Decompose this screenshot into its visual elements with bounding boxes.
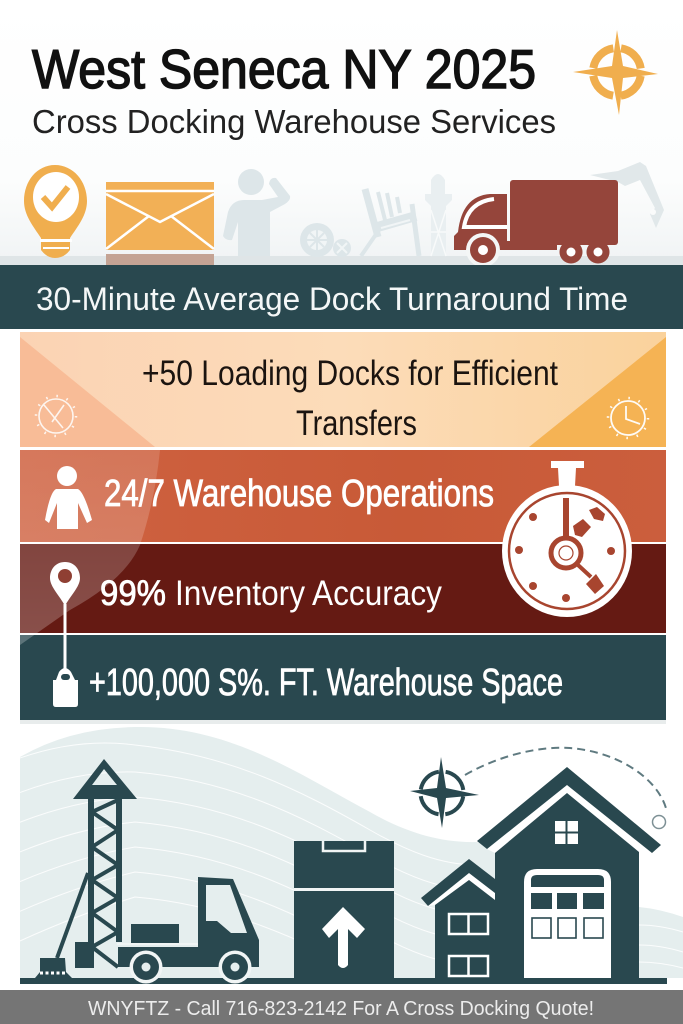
faded icon row: [223, 162, 664, 257]
row: loading docks: [20, 332, 666, 447]
icon: dark compass with dashed route: [410, 748, 667, 828]
footer bar: [0, 990, 683, 1024]
background wave: [0, 727, 683, 978]
icon: lightbulb: [24, 165, 87, 258]
icon: person: [45, 466, 92, 529]
icon: stopwatch: [502, 461, 632, 617]
icon: flatbed truck: [117, 877, 259, 984]
accuracy text: 99%: [100, 574, 166, 613]
loading docks text line 2: Transfers: [296, 404, 417, 443]
panel: metrics stack: [20, 332, 666, 720]
icon: right clock: [608, 398, 648, 438]
icon: faded crane arm: [590, 162, 664, 228]
ground line: [20, 978, 667, 984]
title: West Seneca NY 2025: [32, 38, 536, 100]
panel shadow: [20, 720, 666, 724]
icon: faded chair: [361, 189, 419, 256]
footer text: WNYFTZ - Call 716-823-2142 For A Cross Docking Quote!: [88, 998, 594, 1020]
icon: faded person: [223, 169, 290, 256]
panel: headline band: [0, 265, 683, 329]
icon: warehouse building: [477, 767, 661, 979]
headline text: 30-Minute Average Dock Turnaround Time: [36, 281, 628, 317]
icon: envelope: [106, 182, 214, 265]
row: warehouse operations: [20, 450, 666, 542]
icon: left clock: [36, 396, 76, 436]
loading docks text: +50 Loading Docks for Efficient: [142, 354, 558, 393]
row: inventory accuracy: [20, 544, 666, 633]
icon: small house: [421, 859, 495, 979]
icon: location pin and tag: [50, 562, 80, 707]
icon: faded tower: [425, 174, 452, 256]
icon: delivery truck: [454, 180, 618, 267]
icon: faded wheels: [300, 223, 351, 257]
translucent sheen: [20, 450, 160, 645]
icon: package box with arrow: [294, 841, 394, 979]
icon: orange compass star: [573, 30, 658, 115]
operations text: 24/7 Warehouse Operations: [104, 473, 494, 515]
subtitle: Cross Docking Warehouse Services: [32, 103, 556, 140]
shadow strip above band: [0, 256, 683, 265]
accuracy text: Inventory Accuracy: [175, 574, 442, 613]
icon: lattice tower: [35, 759, 137, 978]
row: warehouse space: [20, 635, 666, 720]
header background: [0, 0, 683, 258]
